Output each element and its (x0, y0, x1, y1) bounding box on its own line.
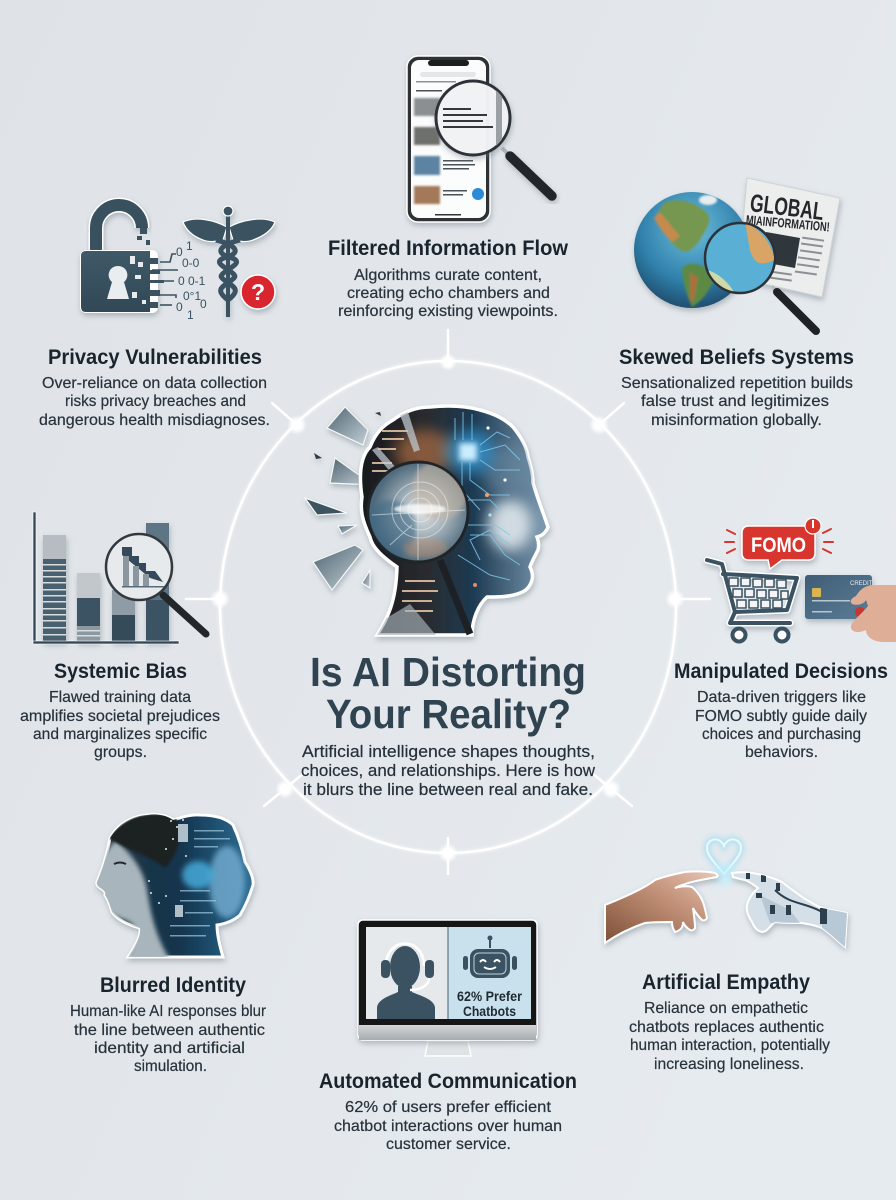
description: simulation. (134, 1058, 207, 1075)
icon: human and robot hands with heart (605, 839, 850, 950)
description: Reliance on empathetic (644, 1000, 808, 1017)
title: Is AI Distorting (310, 649, 586, 695)
description: amplifies societal prejudices (20, 708, 220, 725)
description: choices and purchasing (702, 726, 861, 743)
description: FOMO subtly guide daily (695, 708, 867, 725)
heading: Systemic Bias (54, 660, 187, 683)
shattered glass shards (305, 407, 381, 590)
icon: globe, newspaper and magnifier (634, 178, 840, 331)
central head illustration (305, 406, 548, 640)
icon: monitor with agent and chatbot (358, 920, 537, 1056)
description: behaviors. (745, 744, 818, 761)
icon: phone with magnifier (407, 56, 552, 222)
heading: Skewed Beliefs Systems (619, 346, 854, 369)
description: customer service. (386, 1136, 511, 1153)
intro text: choices, and relationships. Here is how (301, 762, 595, 780)
panel: manipulated decisions (674, 518, 896, 761)
icon: globe, newspaper and magnifier: MIAINFORMATION! (745, 212, 830, 234)
heading: Blurred Identity (100, 974, 246, 997)
description: and marginalizes specific (33, 726, 207, 743)
description: misinformation globally. (651, 412, 822, 429)
description: reinforcing existing viewpoints. (338, 303, 558, 320)
description: Data-driven triggers like (697, 689, 866, 706)
description (629, 1000, 830, 1073)
head silhouette (360, 406, 548, 635)
title: Your Reality? (326, 691, 571, 737)
description (338, 267, 558, 320)
heading: Manipulated Decisions (674, 660, 888, 683)
description: Algorithms curate content, (354, 267, 542, 284)
heading: Filtered Information Flow (328, 237, 569, 260)
description: Human-like AI responses blur (70, 1003, 267, 1020)
icon: bar chart with magnifier (33, 512, 206, 644)
icon: broken lock and caduceus: 0 0-1 (178, 274, 206, 288)
panel: systemic bias (20, 512, 220, 761)
panel: automated communication (319, 920, 577, 1153)
description (334, 1099, 562, 1153)
description: identity and artificial (94, 1040, 245, 1057)
description: dangerous health misdiagnoses. (39, 412, 270, 429)
circuit texture inside head (372, 412, 536, 640)
panel: filtered information flow (328, 56, 569, 320)
intro text: it blurs the line between real and fake. (303, 781, 593, 799)
description: human interaction, potentially (630, 1037, 830, 1054)
description: Over-reliance on data collection (42, 375, 267, 392)
intro text (301, 743, 595, 799)
description: creating echo chambers and (347, 285, 550, 302)
description (20, 689, 220, 761)
heading: Privacy Vulnerabilities (48, 346, 262, 369)
icon: broken lock and caduceus: 1 (186, 239, 193, 253)
intro text: Artificial intelligence shapes thoughts, (302, 743, 595, 761)
icon: broken lock and caduceus: ? (251, 279, 265, 305)
heading: Automated Communication (319, 1070, 577, 1093)
icon: FOMO cart and credit card: CREDIT (850, 581, 873, 587)
icon: monitor with agent and chatbot: Chatbots (463, 1003, 516, 1019)
description: the line between authentic (74, 1022, 265, 1039)
description (70, 1003, 267, 1075)
description (695, 689, 867, 761)
icon: broken lock and caduceus: 0 (176, 245, 183, 259)
magnifying glass (440, 560, 470, 634)
description: chatbots replaces authentic (629, 1019, 824, 1036)
icon: monitor with agent and chatbot: 62% Prefer (457, 988, 522, 1004)
description: groups. (94, 744, 147, 761)
icon: broken lock and caduceus: 0 (176, 300, 183, 314)
icon: broken lock and caduceus: 1 (187, 308, 194, 322)
panel: skewed beliefs systems (619, 178, 854, 429)
description (39, 375, 270, 429)
description: false trust and legitimizes (641, 393, 829, 410)
heading: Artificial Empathy (642, 971, 810, 994)
description: 62% of users prefer efficient (345, 1099, 552, 1116)
panel: blurred identity (70, 814, 267, 1075)
title (310, 649, 586, 737)
description: chatbot interactions over human (334, 1118, 562, 1135)
description: risks privacy breaches and (65, 393, 246, 410)
description: increasing loneliness. (654, 1056, 804, 1073)
icon: human and digital double head (92, 814, 253, 960)
description (621, 375, 853, 429)
icon: FOMO cart and credit card (707, 518, 896, 642)
icon: broken lock and caduceus: 0°1 (183, 289, 201, 303)
description: Sensationalized repetition builds (621, 375, 853, 392)
panel: privacy vulnerabilities (39, 205, 275, 429)
icon: broken lock and caduceus (80, 205, 275, 322)
ring with connector nodes (186, 330, 710, 874)
panel: artificial empathy (605, 839, 850, 1073)
icon: broken lock and caduceus: 0-0 (182, 256, 200, 270)
description: Flawed training data (49, 689, 191, 706)
icon: broken lock and caduceus: 0 (200, 297, 207, 311)
icon: FOMO cart and credit card: FOMO (751, 534, 806, 557)
icon: globe, newspaper and magnifier: GLOBAL (748, 189, 825, 226)
